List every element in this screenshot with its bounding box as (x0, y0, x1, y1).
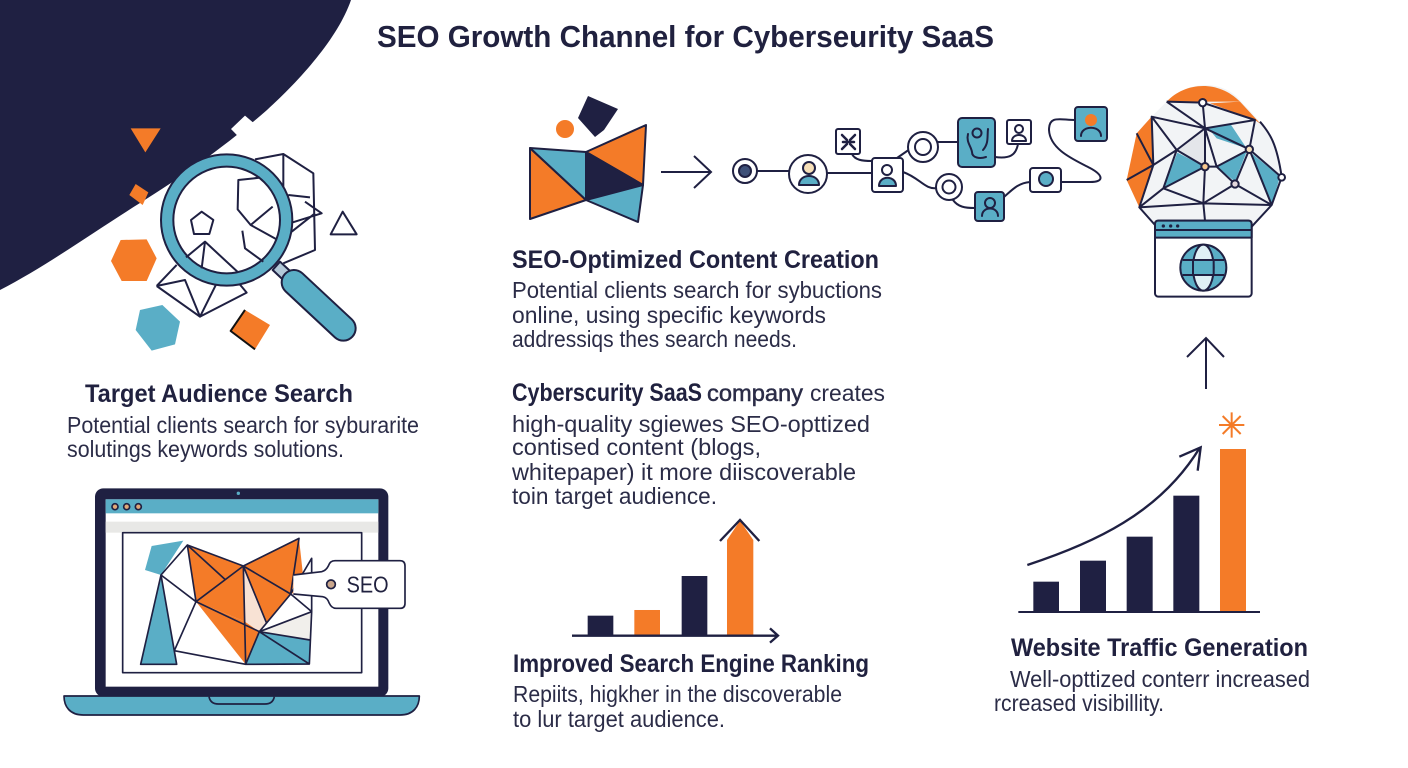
ring node upper (908, 132, 938, 162)
text: ranking description: to lur target audience. (513, 706, 725, 732)
white diamond (231, 116, 260, 142)
text: company paragraph: high-quality sgiewes SEO-opttized (512, 411, 870, 437)
text: company paragraph: Cyberscurity SaaS (512, 379, 702, 407)
browser window (1155, 221, 1252, 297)
small orange diamond (129, 184, 148, 205)
trackpad notch (209, 697, 274, 704)
icon: bowtie polygons (530, 96, 646, 222)
bar chart: ranking (572, 520, 778, 643)
text: traffic description (994, 666, 1310, 716)
SEO tag (293, 561, 405, 608)
text: company paragraph: whitepaper) it more diiscoverable (511, 459, 856, 485)
laptop body (95, 488, 388, 697)
arrow: up to globe (1187, 338, 1224, 389)
mesh nodes (1199, 99, 1285, 188)
orange square (231, 310, 270, 349)
outline triangle (331, 212, 357, 234)
icon: polygon globe sphere with browser (1127, 85, 1285, 297)
text: traffic description: rcreased visibillity. (994, 690, 1164, 716)
magnifier handle (273, 262, 343, 328)
text: traffic description: Well-opttized conterr increased (1010, 666, 1310, 692)
person square node (872, 158, 903, 192)
outlined polyhedron (157, 154, 322, 317)
orange triangle (131, 128, 161, 152)
text: target audience description: solutings keywords solutions. (67, 436, 344, 462)
heading: content creation: SEO-Optimized Content Creation (512, 246, 879, 274)
shapes inside lens (186, 178, 277, 272)
teal facets (1163, 123, 1280, 205)
text: content creation description: Potential clients search for sybuctions (512, 277, 882, 303)
teal person box upper (1075, 107, 1107, 141)
inner frame (123, 533, 362, 673)
traffic bars (1033, 449, 1246, 612)
axis and arrowheads (572, 520, 778, 643)
text: company paragraph: contised content (blogs, (512, 434, 761, 460)
text: target audience description (67, 412, 419, 462)
connector lines (757, 119, 1101, 208)
browser bar (106, 499, 378, 513)
text: ranking description: Repiits, higkher in the discoverable (513, 681, 842, 707)
camera (237, 492, 240, 495)
axis (1018, 609, 1260, 615)
start node (733, 159, 757, 183)
large teal card (958, 118, 995, 167)
SEO tag: SEO (347, 572, 389, 598)
heading: target audience search: Target Audience Search (85, 380, 353, 408)
growth arrow (1027, 447, 1201, 565)
heading: website traffic: Website Traffic Generation (1011, 634, 1308, 662)
broken icon box (836, 129, 860, 154)
text: content creation description: addressiqs thes search needs. (512, 326, 797, 352)
small person box (1007, 120, 1031, 144)
grey facet (1177, 128, 1205, 167)
icon: magnifier over geometric shapes (111, 116, 357, 351)
text: ranking description (513, 681, 842, 732)
icon: laptop with SEO mesh (64, 488, 419, 715)
grey band (106, 522, 378, 533)
magnifier lens (161, 154, 292, 286)
dark corner shape (0, 0, 351, 290)
globe icon (1180, 245, 1226, 291)
teal person box lower (975, 192, 1004, 221)
text: content creation description: online, using specific keywords (512, 302, 826, 328)
ring node lower (936, 174, 962, 200)
sphere outline (1127, 85, 1282, 227)
mesh lines (1127, 102, 1282, 227)
text: target audience description: Potential clients search for syburarite (67, 412, 419, 438)
text: company paragraph (511, 379, 885, 509)
text: company paragraph: toin target audience. (512, 483, 717, 509)
teal hexagon (136, 305, 180, 351)
network of connected nodes (733, 107, 1107, 221)
person circle node (789, 155, 827, 193)
orange facets (1127, 86, 1261, 207)
circle box node (1030, 168, 1061, 192)
text: company paragraph: company (707, 380, 803, 406)
orange spark (1219, 412, 1244, 438)
polygon mesh (141, 538, 312, 664)
title: SEO Growth Channel for Cyberseurity SaaS (377, 19, 994, 54)
laptop base (64, 696, 419, 715)
ranking bars (588, 521, 753, 636)
text: company paragraph: creates (810, 380, 885, 406)
orange hexagon (111, 239, 157, 281)
bar chart: traffic growth (1018, 412, 1260, 612)
arrow: to network (661, 156, 711, 188)
laptop screen (106, 499, 378, 687)
heading: search ranking: Improved Search Engine Ranking (513, 650, 869, 678)
text: content creation description (512, 277, 882, 352)
